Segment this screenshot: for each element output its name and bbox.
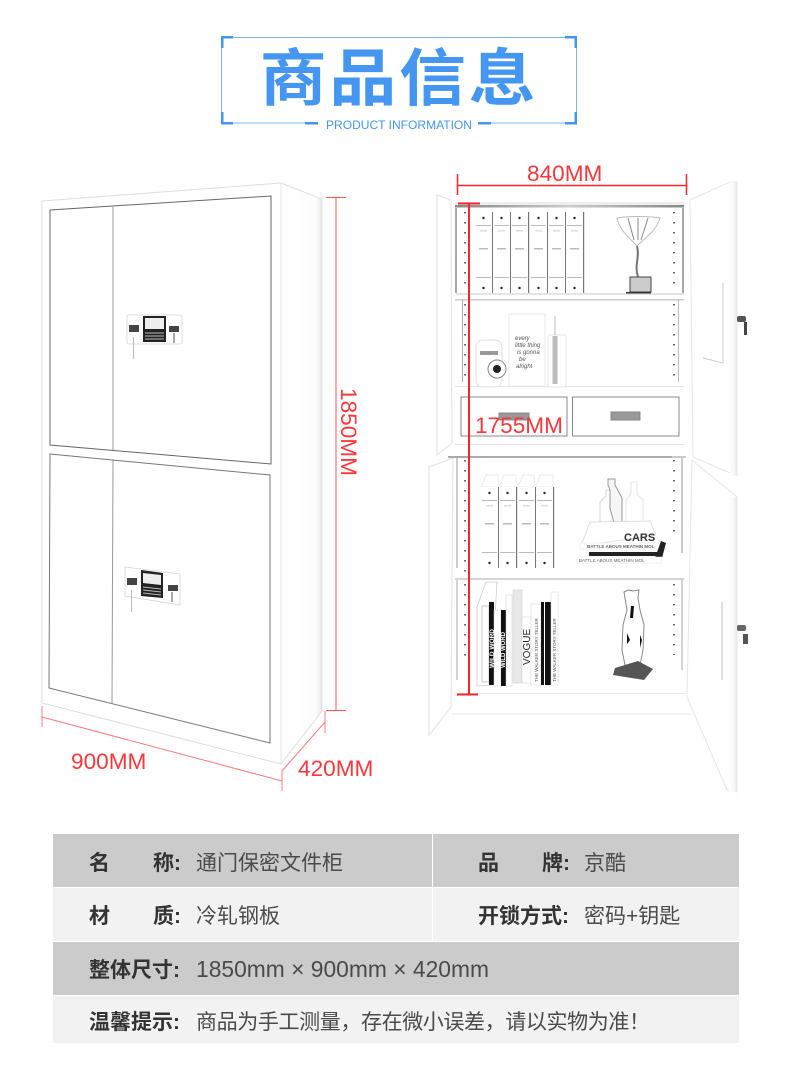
row of standing books: WILD WORD (501, 631, 507, 668)
dimension: width 840MM: 840MM (527, 161, 602, 186)
cabinet interior frame (448, 202, 690, 714)
product information table (53, 834, 739, 1043)
lower electronic lock (125, 567, 180, 612)
dimension: width 900MM: 900MM (71, 749, 146, 774)
dimension: height 1850MM (326, 198, 361, 710)
trophy (617, 216, 660, 294)
row: overall size (53, 942, 739, 995)
notebook and bottle: be (519, 357, 526, 363)
row of standing books: WILD WORD (489, 629, 496, 668)
lower doors (49, 454, 270, 743)
row: name and brand: 京酷 (584, 852, 626, 875)
instant camera (476, 340, 506, 387)
right upper door (690, 182, 737, 476)
row: name and brand: 品 (478, 852, 499, 875)
door keys (737, 316, 748, 644)
row: material and unlock method: 质: (153, 905, 181, 928)
row: overall size: 整体尺寸: (89, 959, 180, 982)
left lower door (429, 458, 453, 735)
title banner (221, 36, 577, 132)
bottles and CARS book stack: BATTLE ABOUS MEATHIN MOL (579, 558, 645, 563)
row: material and unlock method: 冷轧钢板 (196, 905, 280, 928)
upper doors (50, 196, 271, 464)
notebook and bottle: every (515, 336, 531, 342)
row: material and unlock method: 材 (89, 905, 110, 928)
row of standing books: THE WALKER STORY TELLER (534, 617, 539, 682)
notebook and bottle: is gonna (517, 350, 540, 356)
row: name and brand: 称: (153, 852, 181, 875)
row: material and unlock method (53, 888, 739, 941)
title frame (221, 36, 577, 124)
row: note: 商品为手工测量，存在微小误差，请以实物为准！ (196, 1011, 650, 1034)
closed cabinet illustration (42, 183, 322, 764)
bottles and CARS book stack: BATTLE ABOUS MEATHIN MOL (587, 544, 655, 549)
row: name and brand (53, 834, 739, 887)
dimension: inner height 1755MM: 1755MM (475, 413, 563, 438)
notebook and bottle: alright (516, 364, 533, 370)
left upper door (437, 195, 452, 455)
notebook and bottle (509, 314, 566, 387)
row: material and unlock method: 开锁方式: (478, 904, 569, 928)
lower binders (481, 475, 554, 568)
dimension: width 840MM (457, 161, 686, 195)
title subtitle: PRODUCT INFORMATION (326, 118, 472, 132)
row: material and unlock method: 密码+钥匙 (584, 905, 680, 928)
right lower door (687, 460, 737, 792)
title text: 商品信息 (260, 44, 538, 113)
dimension: height 1850MM: 1850MM (336, 388, 361, 476)
row: overall size: 1850mm × 900mm × 420mm (196, 956, 489, 982)
dog statue (613, 590, 653, 680)
bottles and CARS book stack: CARS (624, 532, 655, 544)
row of standing books (477, 582, 558, 686)
row: name and brand: 牌: (542, 852, 570, 875)
drawers (461, 397, 679, 436)
row of standing books: VOGUE (522, 629, 533, 665)
row of standing books: THE WALKER STORY TELLER (552, 617, 557, 682)
upper electronic lock (127, 315, 182, 359)
row: name and brand: 通门保密文件柜 (196, 852, 343, 875)
dimension: depth 420MM (282, 711, 373, 781)
cabinet body (42, 183, 322, 764)
dimension: width 900MM (42, 706, 282, 791)
upper binders (475, 212, 584, 293)
row: name and brand: 名 (89, 852, 110, 875)
open cabinet illustration (429, 182, 748, 792)
row: note (53, 996, 739, 1043)
dimension: inner height 1755MM (457, 203, 563, 694)
row: note: 温馨提示: (89, 1011, 180, 1034)
bottles and CARS book stack (577, 479, 666, 563)
notebook and bottle: little thing (515, 343, 541, 349)
dimension: depth 420MM: 420MM (298, 756, 373, 781)
